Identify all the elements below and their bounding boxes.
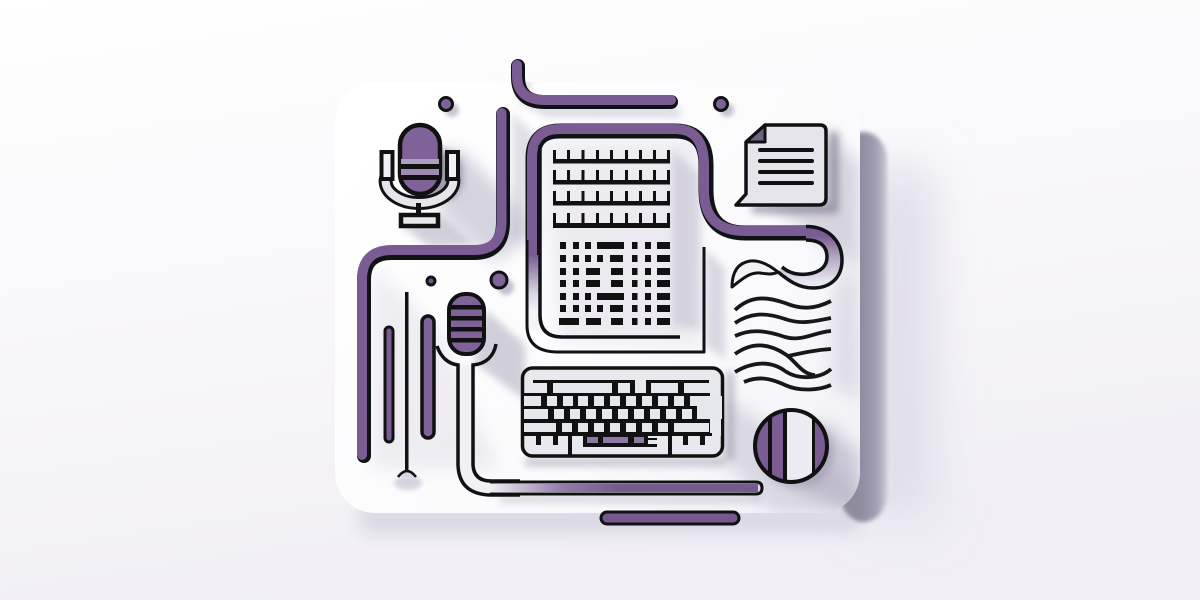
tall purple bar — [422, 316, 434, 438]
comb text rows — [553, 150, 670, 228]
panel shadow — [360, 132, 930, 534]
dot: top right — [714, 98, 728, 110]
wave text lines — [735, 298, 831, 390]
icon: striped circle — [750, 405, 828, 487]
short purple bar — [385, 327, 393, 442]
thin stand line with foot — [398, 292, 416, 477]
icon: small microphone with stand — [437, 294, 520, 495]
dot: top left — [440, 98, 452, 110]
icon: speech bubble note — [736, 125, 826, 205]
icon: studio microphone — [382, 125, 458, 226]
ribbon tail into waves — [732, 226, 842, 288]
bottom connector bar — [490, 482, 762, 494]
panel: white card — [335, 82, 860, 513]
block text grid — [559, 242, 670, 325]
illustration: voice and text input panel — [0, 0, 958, 548]
top connector line — [517, 65, 671, 102]
bottom tab — [601, 512, 739, 524]
icon: keyboard — [522, 368, 722, 456]
dot: small middle — [427, 277, 435, 285]
document frame with connector ribbon — [527, 129, 808, 352]
cast shadows on the card — [372, 70, 860, 513]
dot: medium middle — [491, 272, 507, 288]
long connector line: left — [362, 113, 503, 456]
